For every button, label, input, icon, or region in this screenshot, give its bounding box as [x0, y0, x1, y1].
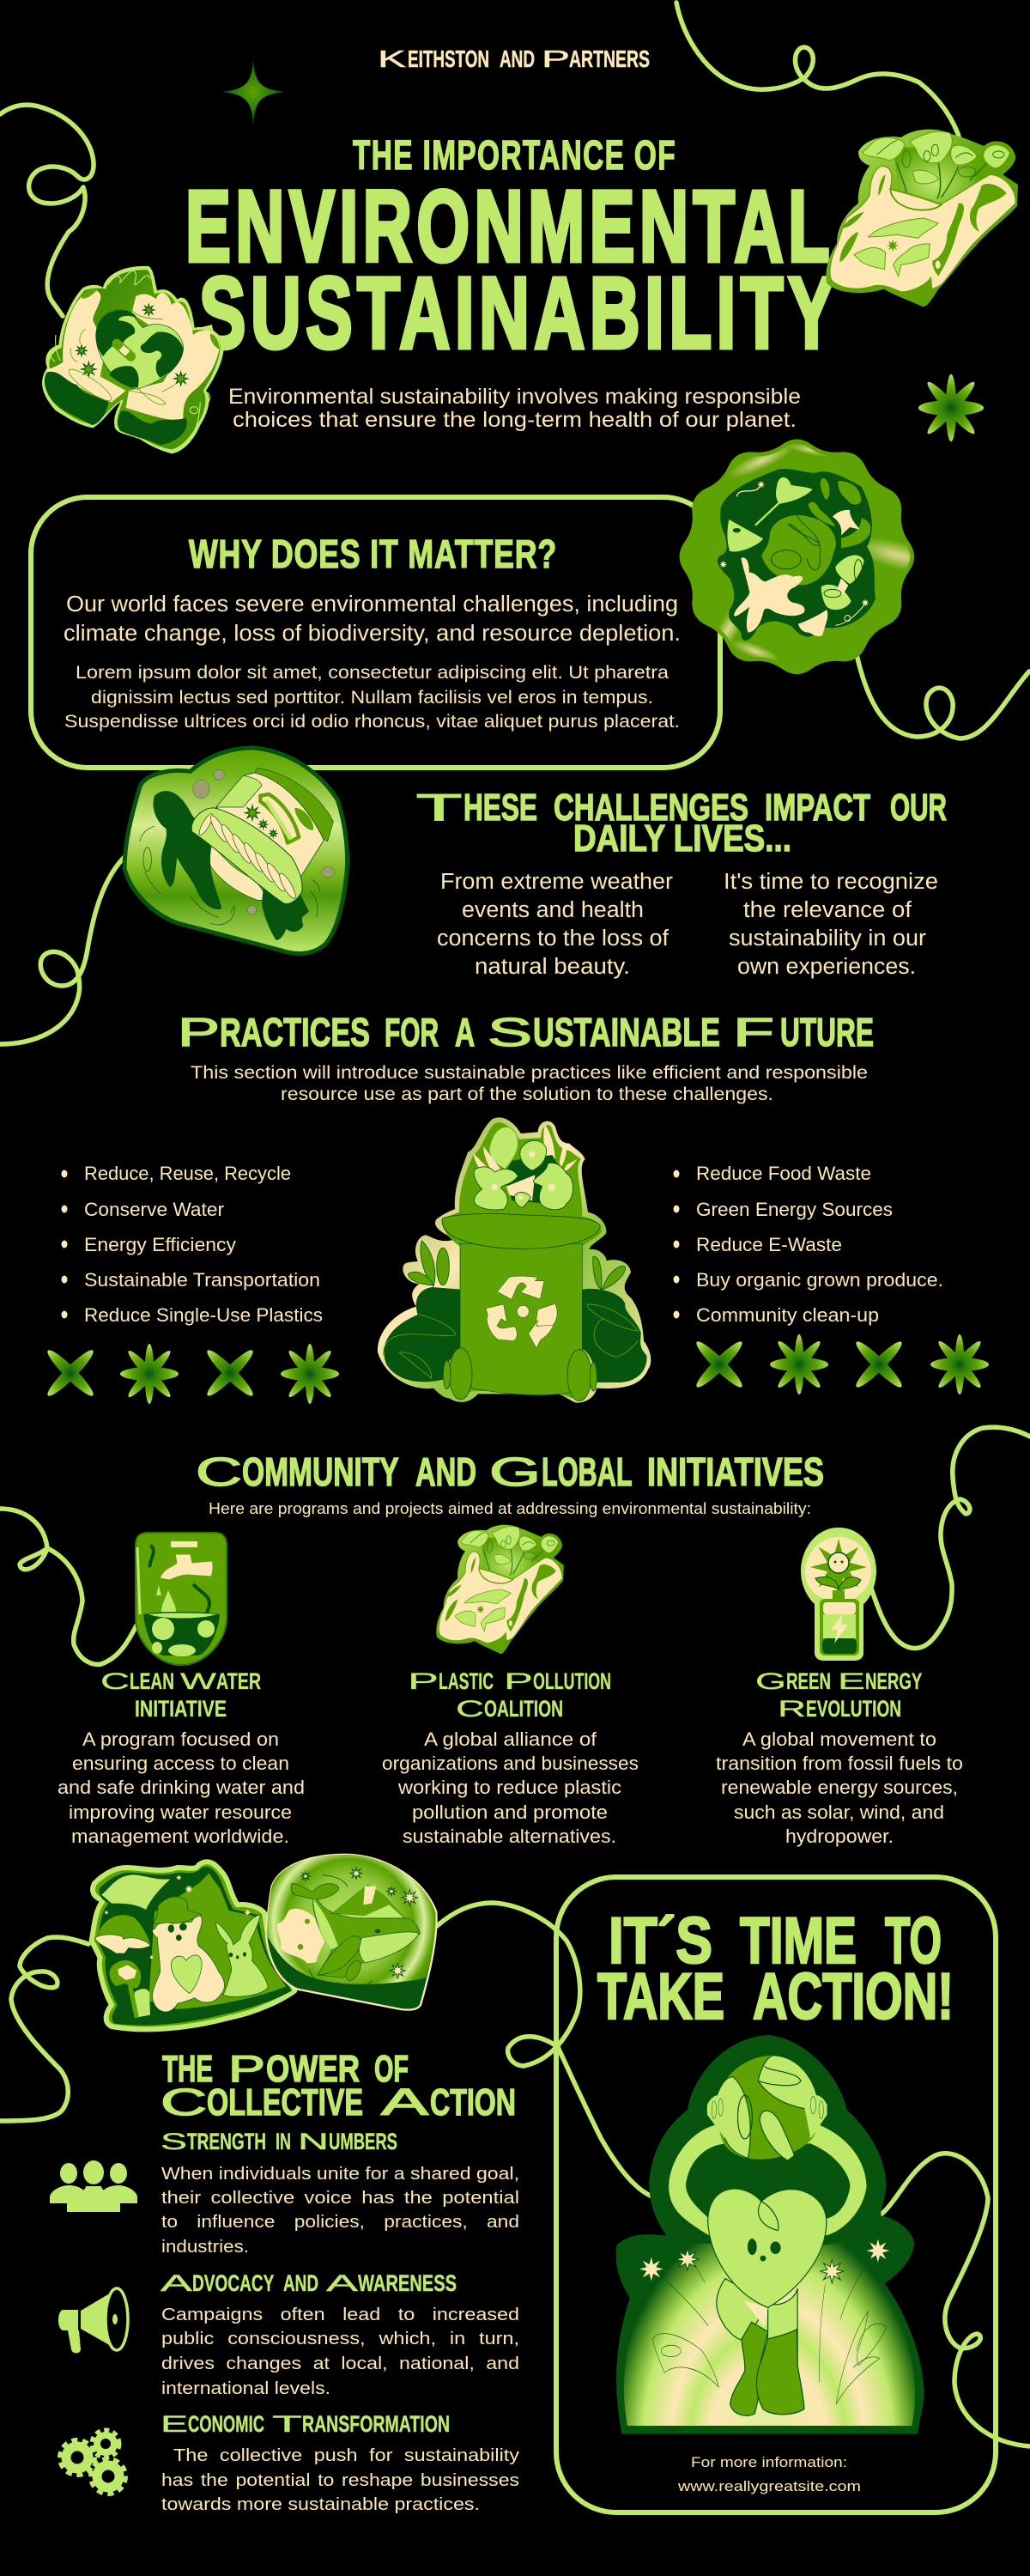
heading: practices: F: [733, 1010, 774, 1054]
icon: people: [50, 2160, 137, 2212]
heading: green energy: EVOLUTION: [806, 1696, 901, 1722]
heading: take action: IT´S: [609, 1905, 712, 1978]
text: lorem ipsum: dignissim lectus sed porttitor. Nullam facilisis vel eros in tempus.: [91, 687, 653, 708]
heading: plastic pollution: P: [408, 1668, 439, 1694]
heading: clean water: C: [100, 1668, 130, 1694]
decorative string: character to right: [880, 2154, 1030, 2446]
heading: practices: P: [178, 1010, 220, 1054]
sticker: hands holding globe: [42, 266, 224, 453]
decorative string: community right: [870, 1427, 1030, 1649]
list: practices right: Buy organic grown produce.: [696, 1269, 943, 1291]
text: economic transformation: T: [272, 2411, 302, 2437]
heading: power of collective action: OLLECTIVE: [207, 2081, 363, 2123]
heading: plastic pollution: C: [456, 1696, 484, 1722]
heading: power of collective action: A: [381, 2081, 429, 2123]
text: green energy: hydropower.: [785, 1826, 894, 1847]
text: clean water: management worldwide.: [71, 1826, 289, 1847]
title: THE IMPORTANCE OF: [353, 133, 676, 179]
heading: these challenges: IMPACT: [765, 787, 870, 829]
text: left column: concerns to the loss of: [437, 927, 670, 951]
heading: plastic pollution: OLLUTION: [533, 1668, 611, 1694]
sticker: whale: [266, 1855, 437, 2010]
text: plastic pollution: pollution and promote: [412, 1801, 608, 1823]
heading: practices: USTAINABLE: [533, 1010, 720, 1054]
heading: power of collective action: THE: [162, 2048, 213, 2090]
text: practices intro: This section will introduce sustainable practices like efficient and responsible: [191, 1062, 868, 1083]
text: advocacy and awareness: DVOCACY: [192, 2270, 274, 2296]
company name: P: [542, 46, 570, 72]
text: advocacy and awareness: public consciousness, which, in turn,: [161, 2330, 519, 2348]
heading: power of collective action: P: [228, 2048, 265, 2090]
heading: community: G: [489, 1449, 541, 1494]
heading: clean water: W: [180, 1668, 217, 1694]
text: right column: the relevance of: [743, 898, 912, 922]
sticker: turtle and can: [124, 748, 348, 953]
decorative string: left of turtle: [0, 856, 125, 1044]
heading: community: C: [196, 1449, 242, 1494]
text: economic transformation: E: [161, 2411, 188, 2437]
text: challenges summary: Our world faces severe environmental challenges, including: [66, 592, 678, 617]
title: [185, 133, 839, 370]
text: clean water: improving water resource: [69, 1801, 292, 1823]
heading: plastic pollution: LASTIC: [439, 1668, 494, 1694]
heading: power of collective action: OWER: [266, 2048, 360, 2090]
text: more information: www.reallygreatsite.com: [677, 2478, 861, 2494]
sticker: plastic bag: [826, 130, 1018, 307]
text: green energy: A global movement to: [742, 1728, 936, 1750]
list: practices left: Energy Efficiency: [84, 1234, 236, 1255]
text: right column: own experiences.: [737, 955, 916, 979]
text: practices intro: resource use as part of the solution to these challenges.: [281, 1084, 773, 1104]
heading: community: OMMUNITY: [242, 1449, 398, 1494]
subtitle: Environmental sustainability involves making responsible: [228, 385, 801, 409]
heading: plastic pollution: P: [504, 1668, 533, 1694]
text: lorem ipsum: [64, 662, 680, 732]
text: advocacy and awareness: A: [161, 2270, 192, 2296]
text: economic transformation: The collective push for sustainability: [173, 2446, 519, 2465]
heading: clean water: INITIATIVE: [135, 1696, 227, 1722]
heading: practices: RACTICES: [220, 1010, 370, 1054]
text: plastic pollution: working to reduce plastic: [397, 1777, 621, 1798]
sticker: recycling bin: [378, 1117, 651, 1403]
text: advocacy and awareness: drives changes at local, national, and: [161, 2354, 519, 2373]
text: advocacy and awareness: international levels.: [161, 2379, 330, 2398]
text: economic transformation: CONOMIC: [188, 2411, 264, 2437]
icons: flowers right: [693, 1334, 989, 1394]
heading: clean water: LEAN: [130, 1668, 174, 1694]
heading: community: AND: [415, 1449, 476, 1494]
decorative string: top right: [676, 3, 960, 142]
icon: gears: [60, 2430, 125, 2494]
decorative string: collective left: [0, 1937, 88, 2121]
text: right column: It's time to recognize: [724, 870, 938, 894]
text: strength in numbers: IN: [276, 2129, 291, 2154]
company name: AND: [500, 46, 535, 72]
text: green energy: such as solar, wind, and: [734, 1801, 944, 1823]
heading: why does it matter: WHY DOES IT MATTER?: [189, 532, 557, 576]
heading: take action: TAKE: [597, 1960, 724, 2033]
decorative string: community left: [0, 1509, 136, 1664]
panel: clean water: [58, 1533, 305, 1847]
text: clean water: and safe drinking water and: [58, 1777, 305, 1798]
heading: take action: TIME: [740, 1905, 857, 1978]
heading: green energy: R: [778, 1696, 806, 1722]
text: challenges summary: [64, 592, 681, 646]
text: advocacy and awareness: A: [326, 2270, 358, 2296]
icons: flowers left: [44, 1344, 339, 1404]
text: right column: [724, 870, 938, 979]
panel: why does it matter: [31, 497, 720, 768]
company name: ARTNERS: [569, 46, 650, 72]
illustration: character holding globe: [616, 2035, 924, 2434]
list: practices right: Reduce Food Waste: [696, 1163, 871, 1184]
panel: plastic pollution: [382, 1525, 639, 1847]
text: advocacy and awareness: AND: [283, 2270, 318, 2296]
company name: EITHSTON: [408, 46, 489, 72]
heading: green energy: NERGY: [865, 1668, 922, 1694]
list: practices left: Sustainable Transportation: [84, 1269, 320, 1291]
text: more information: [677, 2454, 861, 2494]
text: clean water: A program focused on: [82, 1728, 279, 1750]
text: strength in numbers: S: [161, 2129, 187, 2154]
text: economic transformation: [161, 2411, 519, 2514]
icon: bag: [436, 1525, 564, 1654]
heading: green energy: G: [755, 1668, 786, 1694]
list: practices left: Reduce, Reuse, Recycle: [84, 1163, 291, 1184]
company name: K: [378, 46, 407, 72]
sticker: forest animals: [92, 1862, 294, 2029]
text: green energy: [716, 1728, 963, 1847]
heading: take action: [597, 1905, 954, 2033]
heading: these challenges: HESE: [464, 787, 537, 829]
heading: practices: UTURE: [780, 1010, 874, 1054]
text: left column: events and health: [462, 898, 644, 922]
text: clean water: [58, 1728, 305, 1847]
text: clean water: ensuring access to clean: [72, 1753, 289, 1774]
icon: megaphone: [58, 2288, 128, 2353]
heading: power of collective action: OF: [374, 2048, 409, 2090]
text: lorem ipsum: Lorem ipsum dolor sit amet, consectetur adipiscing elit. Ut pharetra: [76, 662, 669, 683]
icon: tap card: [136, 1533, 227, 1665]
list: practices left: [62, 1163, 323, 1326]
list: practices right: [673, 1163, 943, 1326]
text: strength in numbers: industries.: [161, 2238, 249, 2257]
heading: these challenges: OUR: [890, 787, 947, 829]
text: green energy: transition from fossil fuels to: [716, 1753, 963, 1774]
text: advocacy and awareness: Campaigns often lead to increased: [161, 2306, 519, 2324]
heading: practices: FOR: [385, 1010, 439, 1054]
decorative string: whale to character: [437, 1903, 652, 2196]
heading: these challenges: T: [416, 787, 462, 829]
text: more information: For more information:: [691, 2454, 847, 2470]
text: plastic pollution: A global alliance of: [424, 1728, 597, 1750]
text: left column: natural beauty.: [475, 955, 630, 979]
heading: power of collective action: [161, 2048, 516, 2123]
heading: plastic pollution: OALITION: [484, 1696, 563, 1722]
text: strength in numbers: N: [298, 2129, 329, 2154]
heading: community: LOBAL: [542, 1449, 632, 1494]
heading: power of collective action: CTION: [430, 2081, 516, 2123]
text: lorem ipsum: Suspendisse ultrices orci id odio rhoncus, vitae aliquet purus placerat.: [64, 711, 680, 732]
heading: community: INITIATIVES: [647, 1449, 824, 1494]
text: plastic pollution: sustainable alternatives.: [403, 1826, 616, 1847]
sticker: earth badge: [680, 440, 915, 675]
text: strength in numbers: When individuals unite for a shared goal,: [161, 2165, 519, 2184]
text: advocacy and awareness: [161, 2270, 519, 2398]
text: right column: sustainability in our: [729, 927, 927, 951]
text: strength in numbers: UMBERS: [329, 2129, 397, 2154]
heading: these challenges second line: DAILY LIVES...: [573, 817, 791, 860]
heading: power of collective action: C: [161, 2081, 207, 2123]
text: strength in numbers: their collective voice has the potential: [161, 2189, 519, 2208]
text: plastic pollution: [382, 1728, 639, 1847]
text: strength in numbers: [161, 2129, 519, 2257]
list: practices left: Conserve Water: [84, 1199, 224, 1220]
text: strength in numbers: to influence policies, practices, and: [161, 2213, 519, 2232]
subtitle: choices that ensure the long-term health of our planet.: [233, 408, 797, 432]
panel: take action: [556, 1877, 996, 2512]
decorative string: right of badge: [857, 654, 1029, 738]
list: practices right: Community clean-up: [696, 1304, 879, 1326]
icon: sun and battery: [801, 1528, 876, 1661]
text: strength in numbers: TRENGTH: [187, 2129, 266, 2154]
list: practices left: Reduce Single-Use Plastics: [84, 1304, 323, 1326]
text: left column: [437, 870, 674, 979]
text: challenges summary: climate change, loss of biodiversity, and resource depletion.: [64, 622, 681, 646]
list: practices right: Green Energy Sources: [696, 1199, 893, 1220]
heading: clean water: ATER: [216, 1668, 261, 1694]
list: practices right: Reduce E-Waste: [696, 1234, 842, 1255]
text: green energy: renewable energy sources,: [721, 1777, 958, 1798]
heading: take action: ACTION!: [753, 1960, 954, 2033]
icon: flower: [918, 374, 984, 441]
text: advocacy and awareness: WARENESS: [358, 2270, 457, 2296]
text: community intro: Here are programs and projects aimed at addressing environmental sustainability:: [209, 1500, 811, 1517]
text: economic transformation: RANSFORMATION: [302, 2411, 450, 2437]
subtitle: [228, 385, 801, 432]
decorative string: top left: [0, 105, 94, 316]
heading: take action: TO: [885, 1905, 942, 1978]
panel: green energy: [716, 1528, 963, 1847]
heading: practices: A: [455, 1010, 474, 1054]
heading: green energy: E: [838, 1668, 865, 1694]
heading: these challenges: CHALLENGES: [554, 787, 748, 829]
heading: green energy: REEN: [786, 1668, 831, 1694]
text: plastic pollution: organizations and businesses: [382, 1753, 639, 1774]
text: practices intro: [191, 1062, 868, 1104]
heading: practices: S: [488, 1010, 532, 1054]
text: left column: From extreme weather: [440, 870, 674, 894]
text: economic transformation: towards more sustainable practices.: [161, 2495, 480, 2514]
text: economic transformation: has the potential to reshape businesses: [161, 2471, 519, 2490]
icon: sparkle: [221, 60, 285, 125]
